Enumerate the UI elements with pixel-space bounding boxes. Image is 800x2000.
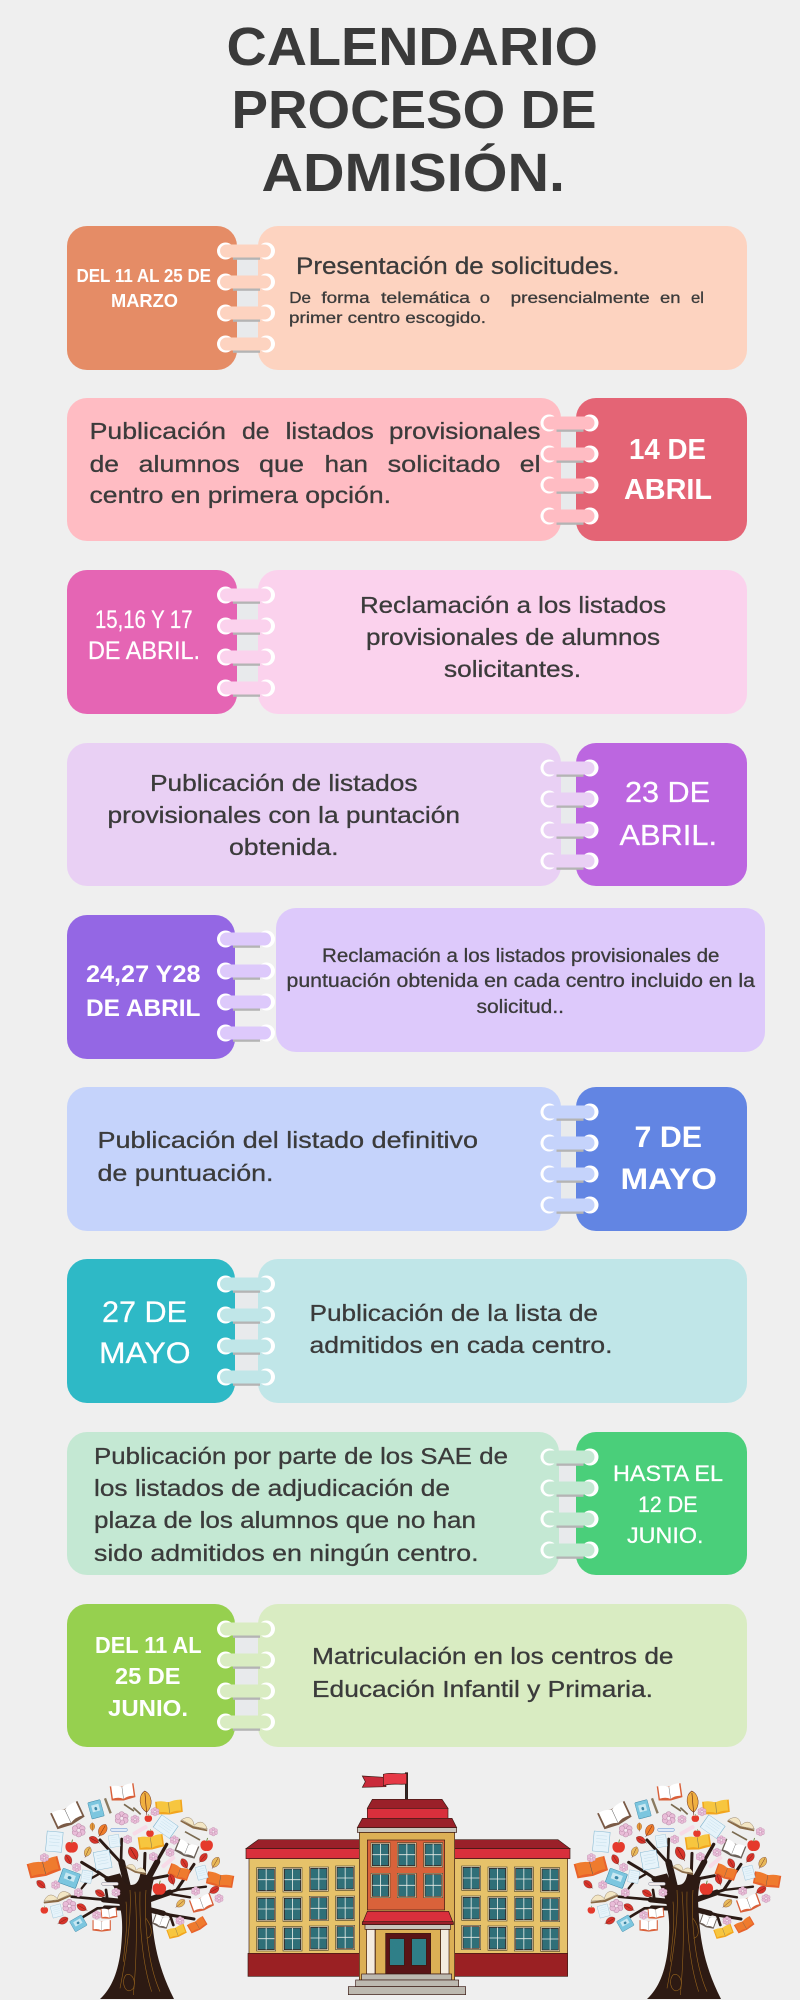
panel: reclamación puntuación: DE ABRIL xyxy=(86,995,200,1022)
panel: presentación de solicitudes: en xyxy=(660,290,680,307)
panel: reclamación puntuación: Reclamación a los listados provisionales de xyxy=(322,945,720,967)
panel: listados con la puntuación: ABRIL. xyxy=(620,820,717,852)
icon: school building xyxy=(246,1773,570,1995)
panel: presentación de solicitudes: o xyxy=(480,290,490,307)
panel: listados provisionales: centro en primera opción. xyxy=(90,482,391,508)
panel: adjudicación SAE: JUNIO. xyxy=(627,1523,704,1548)
panel: lista de admitidos: 27 DE xyxy=(102,1296,187,1329)
panel: lista de admitidos: Publicación de la lista de xyxy=(310,1300,598,1326)
panel: listados provisionales: alumnos xyxy=(139,451,240,477)
panel: listados con la puntuación: provisionales con la puntación xyxy=(108,802,460,828)
panel: listados provisionales xyxy=(67,398,747,541)
panel: listados provisionales: listados xyxy=(286,418,374,444)
panel: adjudicación SAE xyxy=(67,1432,747,1575)
panel: listado definitivo: 7 DE xyxy=(634,1121,702,1154)
panel: reclamación a los listados: 15,16 Y 17 xyxy=(95,606,192,634)
panel: matriculación: 25 DE xyxy=(115,1663,180,1689)
panel: presentación de solicitudes: primer centro escogido. xyxy=(289,310,486,327)
panel: presentación de solicitudes: forma xyxy=(321,290,370,307)
panel: adjudicación SAE: HASTA EL xyxy=(613,1461,723,1486)
title xyxy=(226,17,598,203)
panel: listados provisionales: el xyxy=(520,451,540,477)
panel: reclamación a los listados xyxy=(67,570,747,714)
panel: listados con la puntuación xyxy=(67,743,747,886)
panel: listados provisionales: que xyxy=(259,451,304,477)
panel: presentación de solicitudes xyxy=(67,226,747,370)
panel: listados provisionales: Publicación xyxy=(90,418,226,444)
panel: reclamación a los listados: DE ABRIL. xyxy=(88,637,200,665)
panel: reclamación puntuación xyxy=(67,908,765,1059)
panel: listado definitivo: de puntuación. xyxy=(98,1160,274,1186)
panel: adjudicación SAE: los listados de adjudicación de xyxy=(94,1475,450,1501)
panel: adjudicación SAE: 12 DE xyxy=(638,1492,698,1517)
panel: adjudicación SAE: sido admitidos en ningún centro. xyxy=(94,1540,478,1566)
panel: listado definitivo: Publicación del listado definitivo xyxy=(98,1127,478,1153)
panel: reclamación puntuación: puntuación obtenida en cada centro incluido en la xyxy=(286,970,755,992)
panel: reclamación a los listados: provisionales de alumnos xyxy=(366,624,660,650)
panel: presentación de solicitudes: Presentación de solicitudes. xyxy=(296,253,620,280)
panel: presentación de solicitudes: De xyxy=(289,290,311,307)
title: ADMISIÓN. xyxy=(262,143,565,203)
panel: listados provisionales: han xyxy=(325,451,368,477)
panel: listados provisionales: solicitado xyxy=(388,451,500,477)
panel: matriculación: Educación Infantil y Primaria. xyxy=(312,1676,653,1702)
title: PROCESO DE xyxy=(232,80,596,140)
panel: presentación de solicitudes: telemática xyxy=(381,290,470,307)
panel: adjudicación SAE: Publicación por parte de los SAE de xyxy=(94,1443,508,1469)
panel: listados provisionales: ABRIL xyxy=(624,474,712,506)
panel: lista de admitidos: MAYO xyxy=(99,1337,190,1370)
panel: listados con la puntuación: obtenida. xyxy=(229,834,338,860)
title: CALENDARIO xyxy=(226,17,598,77)
panel: adjudicación SAE: plaza de los alumnos que no han xyxy=(94,1507,476,1533)
panel: presentación de solicitudes: DEL 11 AL 25 DE xyxy=(76,266,211,286)
panel: listados provisionales: provisionales xyxy=(389,418,540,444)
panel: listado definitivo xyxy=(67,1087,747,1231)
panel: listados provisionales: de xyxy=(242,418,270,444)
panel: reclamación puntuación: 24,27 Y28 xyxy=(86,961,200,988)
panel: reclamación a los listados: Reclamación a los listados xyxy=(360,592,666,618)
panel: matriculación: JUNIO. xyxy=(108,1695,188,1721)
icon: left tree of books xyxy=(27,1783,234,1999)
panel: matriculación xyxy=(67,1604,747,1747)
panel: listados provisionales: de xyxy=(90,451,119,477)
panel: listados con la puntuación: Publicación de listados xyxy=(150,770,418,796)
panel: reclamación puntuación: solicitud.. xyxy=(476,996,564,1018)
panel: reclamación a los listados: solicitantes. xyxy=(444,656,581,682)
panel: lista de admitidos: admitidos en cada centro. xyxy=(310,1332,612,1358)
panel: listado definitivo: MAYO xyxy=(620,1163,717,1196)
panel: matriculación: Matriculación en los centros de xyxy=(312,1643,674,1669)
panel: lista de admitidos xyxy=(67,1259,747,1403)
icon: right tree of books xyxy=(574,1783,781,1999)
panel: presentación de solicitudes: MARZO xyxy=(111,291,178,311)
panel: presentación de solicitudes: el xyxy=(691,290,704,307)
panel: listados con la puntuación: 23 DE xyxy=(625,777,710,809)
panel: matriculación: DEL 11 AL xyxy=(95,1632,202,1658)
panel: listados provisionales: 14 DE xyxy=(629,434,706,466)
panel: presentación de solicitudes: presencialmente xyxy=(511,290,650,307)
